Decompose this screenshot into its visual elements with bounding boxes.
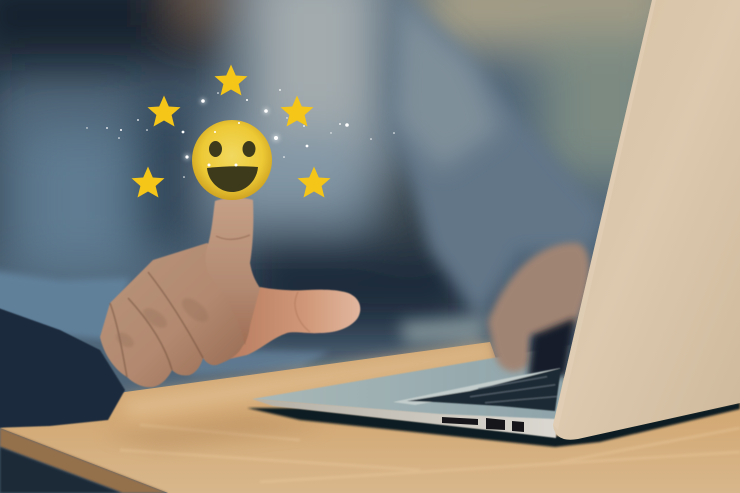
sleeve: dark cuff on the left: [0, 270, 130, 428]
star: lower right: [298, 166, 330, 198]
right shirt sleeve: [395, 0, 605, 320]
star: upper left: [148, 96, 180, 126]
sparkles: [86, 89, 395, 178]
hand pointing at smiley: [100, 198, 360, 387]
blurred far hand on keyboard: [488, 243, 590, 378]
palm and curled fingers: [100, 243, 251, 387]
laptop front edge: [252, 399, 556, 438]
desk surface: [0, 342, 740, 493]
knuckle shading: [113, 294, 212, 351]
star: lower left: [132, 166, 164, 198]
index finger: [206, 198, 260, 345]
laptop deck: [252, 345, 570, 421]
laptop ports: [442, 417, 524, 432]
laptop shadow: [247, 402, 740, 447]
smile: [207, 166, 258, 192]
eyes: [209, 141, 222, 157]
star: upper right: [280, 96, 314, 126]
laptop lid: [553, 0, 740, 440]
finger creases: [110, 272, 203, 377]
laptop: [247, 0, 740, 447]
smiley face: [192, 120, 272, 200]
five rating stars: [132, 64, 330, 198]
extended thumb: [225, 287, 360, 360]
keyboard: [393, 368, 561, 411]
face sparkles: [208, 122, 240, 166]
star: top: [214, 64, 248, 96]
